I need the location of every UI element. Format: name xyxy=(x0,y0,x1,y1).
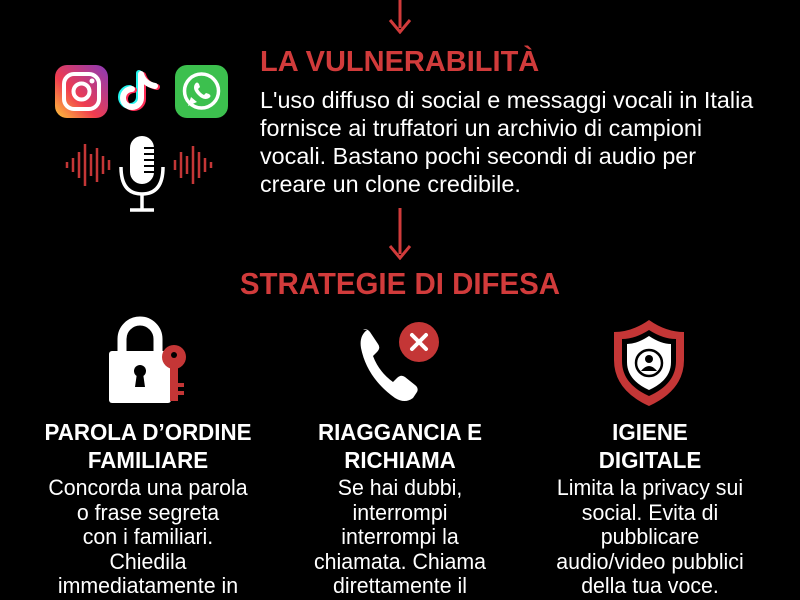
text: igiene body: Limita la privacy sui xyxy=(557,475,743,500)
arrow: middle xyxy=(388,208,412,260)
text: parola body: immediatamente in xyxy=(58,573,238,598)
text: riaggancia body: interrompi la xyxy=(341,524,459,549)
icons: social apps and microphone xyxy=(55,65,228,212)
heading: riaggancia e richiama: RIAGGANCIA E xyxy=(318,419,482,445)
heading: parola d'ordine familiare xyxy=(44,419,251,473)
heading: parola d'ordine familiare: PAROLA D’ORDINE xyxy=(44,419,251,445)
heading: riaggancia e richiama xyxy=(318,419,482,473)
text: riaggancia body xyxy=(314,475,486,598)
column: riaggancia xyxy=(314,419,486,598)
text: vulnerability description: vocali. Bastano pochi secondi di audio per xyxy=(260,143,696,169)
text: riaggancia body: direttamente il xyxy=(333,573,467,598)
text: vulnerability description xyxy=(260,87,754,197)
text: parola body: con i familiari. xyxy=(83,524,213,549)
heading: igiene digitale: DIGITALE xyxy=(599,447,701,473)
text: igiene body xyxy=(556,475,744,598)
text: igiene body: della tua voce. xyxy=(581,573,719,598)
text: parola body: Chiedila xyxy=(109,548,187,574)
text: igiene body: audio/video pubblici xyxy=(556,548,744,574)
text: riaggancia body: interrompi xyxy=(353,500,447,524)
text: vulnerability description: L'uso diffuso di social e messaggi vocali in Italia xyxy=(260,87,753,113)
icon: phone with x xyxy=(360,322,439,401)
text: parola body: Concorda una parola xyxy=(48,475,248,500)
column: igiene digitale xyxy=(556,419,744,598)
text: igiene body: pubblicare xyxy=(601,524,699,549)
heading: riaggancia e richiama: RICHIAMA xyxy=(344,447,456,473)
heading: parola d'ordine familiare: FAMILIARE xyxy=(88,447,208,473)
icon: whatsapp xyxy=(175,65,228,118)
text: parola body xyxy=(48,475,248,598)
text: parola body: o frase segreta xyxy=(77,500,219,524)
heading: igiene digitale: IGIENE xyxy=(612,419,688,445)
heading: strategie di difesa: STRATEGIE DI DIFESA xyxy=(240,266,560,301)
icon: microphone with waves xyxy=(67,136,211,210)
arrow: top xyxy=(388,0,412,34)
column: parola d'ordine xyxy=(44,419,251,598)
heading: igiene digitale xyxy=(599,419,701,473)
heading: la vulnerabilità: LA VULNERABILITÀ xyxy=(260,46,539,78)
text: vulnerability description: creare un clone credibile. xyxy=(260,171,521,197)
text: riaggancia body: Se hai dubbi, xyxy=(338,475,462,500)
icon: shield with user xyxy=(614,320,684,406)
text: riaggancia body: chiamata. Chiama xyxy=(314,548,486,574)
text: igiene body: social. Evita di xyxy=(582,500,718,524)
text: vulnerability description: fornisce ai truffatori un archivio di campioni xyxy=(260,115,702,141)
icon: tiktok xyxy=(121,73,157,108)
icon: lock with key xyxy=(109,316,186,403)
icon: instagram xyxy=(55,65,108,118)
